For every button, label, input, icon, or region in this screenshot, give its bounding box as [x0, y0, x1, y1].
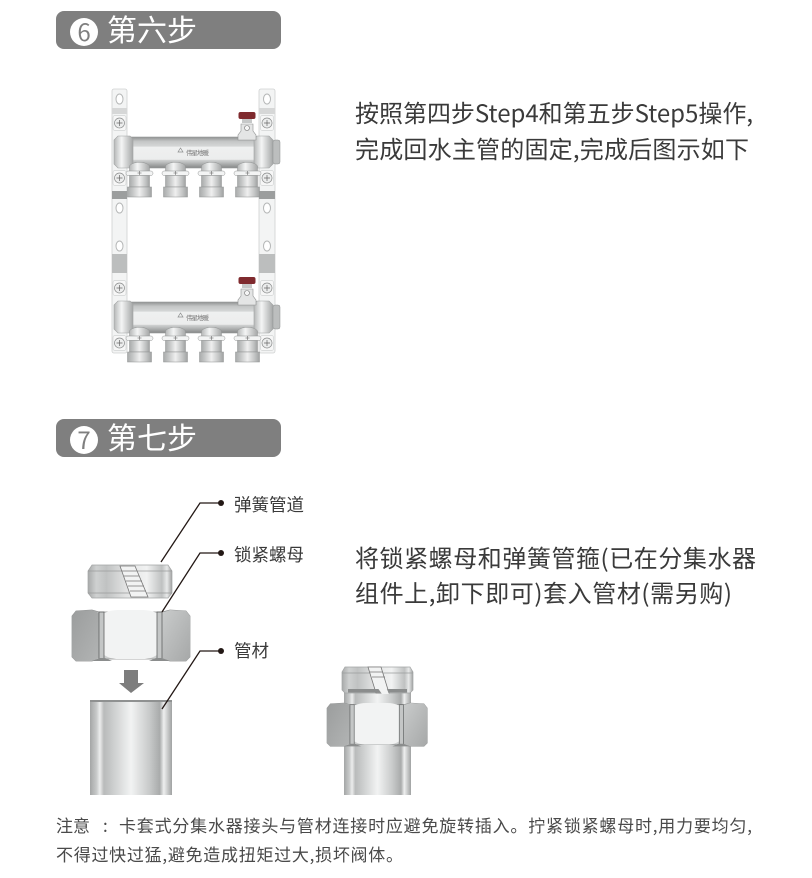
illustration: manifold assembly [112, 89, 280, 362]
assembled nut [327, 703, 427, 746]
spring ring [88, 565, 172, 598]
panel: step 7 heading: 第七步 [107, 414, 197, 458]
arrow: down [119, 670, 144, 693]
label: spring pipe: 弹簧管道 [234, 492, 304, 517]
top manifold bar: 伟星地暖 [186, 147, 210, 157]
panel: step 6 heading: 6 [77, 13, 91, 48]
text block: step 7 instructions [355, 539, 756, 609]
text block: note: 卡套式分集水器接头与管材连接时应避免旋转插入。拧紧锁紧螺母时,用力要均匀, [119, 812, 752, 837]
label: lock nut: 锁紧螺母 [234, 542, 304, 567]
assembled pipe [344, 692, 411, 795]
text block: step 6 instructions [355, 94, 753, 165]
mounting bracket: right [259, 89, 275, 353]
label: pipe material: 管材 [234, 638, 269, 663]
illustration: exploded fitting [72, 492, 304, 795]
top manifold bar [113, 112, 280, 197]
text block: note [56, 812, 752, 866]
panel: step 6 heading: 第六步 [107, 6, 197, 50]
panel: step 7 heading [56, 414, 281, 458]
leader dots [218, 500, 224, 654]
bottom manifold bar: 伟星地暖 [186, 312, 210, 322]
pipe [90, 700, 172, 795]
panel: step 7 heading: 7 [77, 421, 91, 456]
text block: note: 不得过快过猛,避免造成扭矩过大,损坏阀体。 [56, 841, 403, 866]
panel: step 6 heading [56, 6, 281, 50]
text block: step 6 instructions: 按照第四步Step4和第五步Step5操作, [355, 94, 753, 129]
bottom manifold bar [113, 277, 280, 362]
text block: note: 注意 [56, 812, 90, 837]
text block: step 7 instructions: 组件上,卸下即可)套入管材(需另购) [355, 574, 732, 609]
text block: step 7 instructions: 将锁紧螺母和弹簧管箍(已在分集水器 [355, 539, 756, 574]
text block: step 6 instructions: 完成回水主管的固定,完成后图示如下 [355, 130, 749, 165]
leader lines [161, 503, 221, 709]
mounting bracket: left [112, 89, 127, 353]
hex lock nut [72, 610, 190, 661]
text block: note: : [103, 812, 108, 837]
illustration: assembled fitting [327, 667, 427, 795]
assembled ring [342, 667, 413, 694]
